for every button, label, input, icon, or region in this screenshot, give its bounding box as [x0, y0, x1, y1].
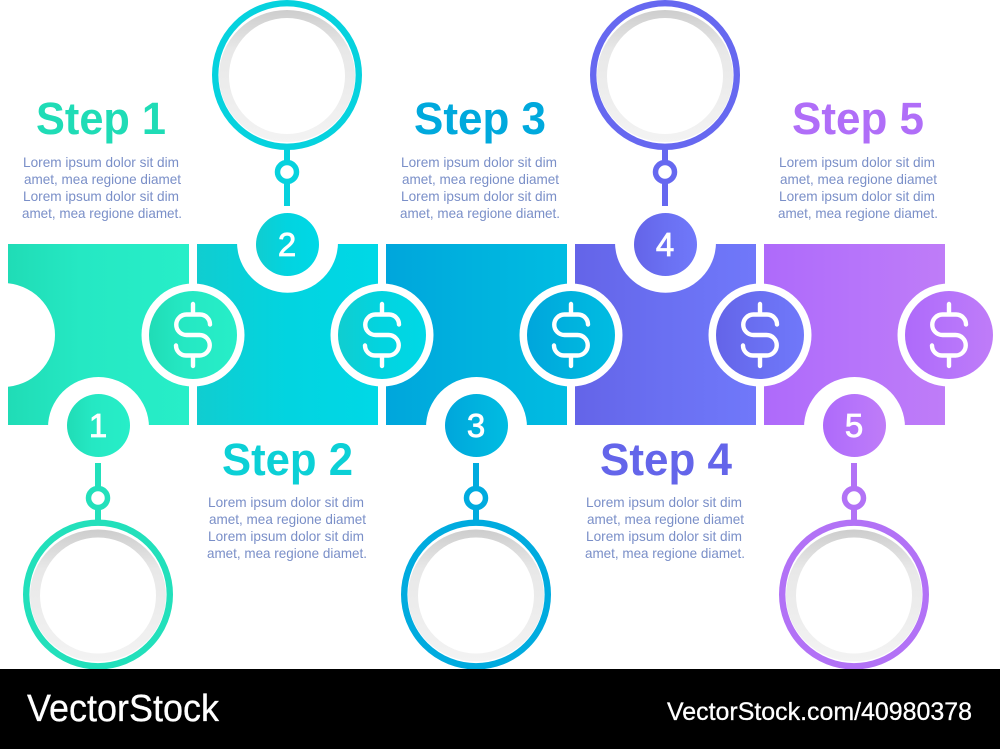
text block: Step 3: amet, mea regione diamet.: [400, 206, 560, 221]
connector and image ring 5: [782, 463, 926, 666]
text block: Step 4: Lorem ipsum dolor sit dim: [586, 495, 742, 510]
text block: Step 5: amet, mea regione diamet: [780, 172, 937, 187]
number badge 1: 1: [89, 407, 107, 444]
text block: Step 5: amet, mea regione diamet.: [778, 206, 938, 221]
text block: Step 2: amet, mea regione diamet: [209, 512, 366, 527]
text block: Step 1: Lorem ipsum dolor sit dim: [23, 189, 179, 204]
heading: Step 2: Step 2: [222, 434, 353, 485]
text block: Step 2: Lorem ipsum dolor sit dim: [208, 495, 364, 510]
heading: Step 5: Step 5: [792, 93, 924, 144]
text block: Step 1: amet, mea regione diamet: [24, 172, 181, 187]
number badge 4: [634, 213, 697, 276]
text block: Step 3: Lorem ipsum dolor sit dim: [401, 189, 557, 204]
heading: Step 4: Step 4: [600, 434, 732, 485]
text block: Step 5: Lorem ipsum dolor sit dim: [779, 189, 935, 204]
number badge 3: [445, 394, 508, 457]
number badge 1: [67, 394, 130, 457]
number badge 3: 3: [467, 407, 485, 444]
text block: Step 5: [778, 155, 938, 221]
icon: dollar badge 3: [527, 291, 615, 379]
text block: Step 4: [585, 495, 745, 561]
heading: Step 3: Step 3: [414, 93, 546, 144]
number badge 4: 4: [656, 226, 674, 263]
icon: dollar badge 1: [149, 291, 237, 379]
text block: Step 2: amet, mea regione diamet.: [207, 546, 367, 561]
panels: five gradient blocks: [8, 244, 945, 425]
text block: Step 5: Lorem ipsum dolor sit dim: [779, 155, 935, 170]
connector and image ring 4: [593, 3, 737, 206]
text block: Step 4: amet, mea regione diamet.: [585, 546, 745, 561]
number badge 2: 2: [278, 226, 296, 263]
text block: Step 2: Lorem ipsum dolor sit dim: [208, 529, 364, 544]
text block: Step 4: Lorem ipsum dolor sit dim: [586, 529, 742, 544]
number badge 5: [823, 394, 886, 457]
text block: Step 1: Lorem ipsum dolor sit dim: [23, 155, 179, 170]
text block: Step 3: Lorem ipsum dolor sit dim: [401, 155, 557, 170]
footer bar: [0, 669, 1000, 749]
heading: Step 1: Step 1: [36, 93, 166, 144]
text block: Step 2: [207, 495, 367, 561]
number badge 5: 5: [845, 407, 863, 444]
text block: Step 1: amet, mea regione diamet.: [22, 206, 182, 221]
text block: Step 4: amet, mea regione diamet: [587, 512, 744, 527]
text block: Step 3: [400, 155, 560, 221]
connector and image ring 2: [215, 3, 359, 206]
footer image id: VectorStock.com/40980378: [667, 698, 972, 726]
number badge 2: [256, 213, 319, 276]
text block: Step 1: [22, 155, 182, 221]
connector and image ring 1: [26, 463, 170, 666]
icon: dollar badge 5: [905, 291, 993, 379]
notches: white cut-outs in the panels: [0, 192, 1000, 478]
icon: dollar badge 4: [716, 291, 804, 379]
icon: dollar badge 2: [338, 291, 426, 379]
footer logo text: VectorStock: [27, 688, 220, 730]
connector and image ring 3: [404, 463, 548, 666]
text block: Step 3: amet, mea regione diamet: [402, 172, 559, 187]
